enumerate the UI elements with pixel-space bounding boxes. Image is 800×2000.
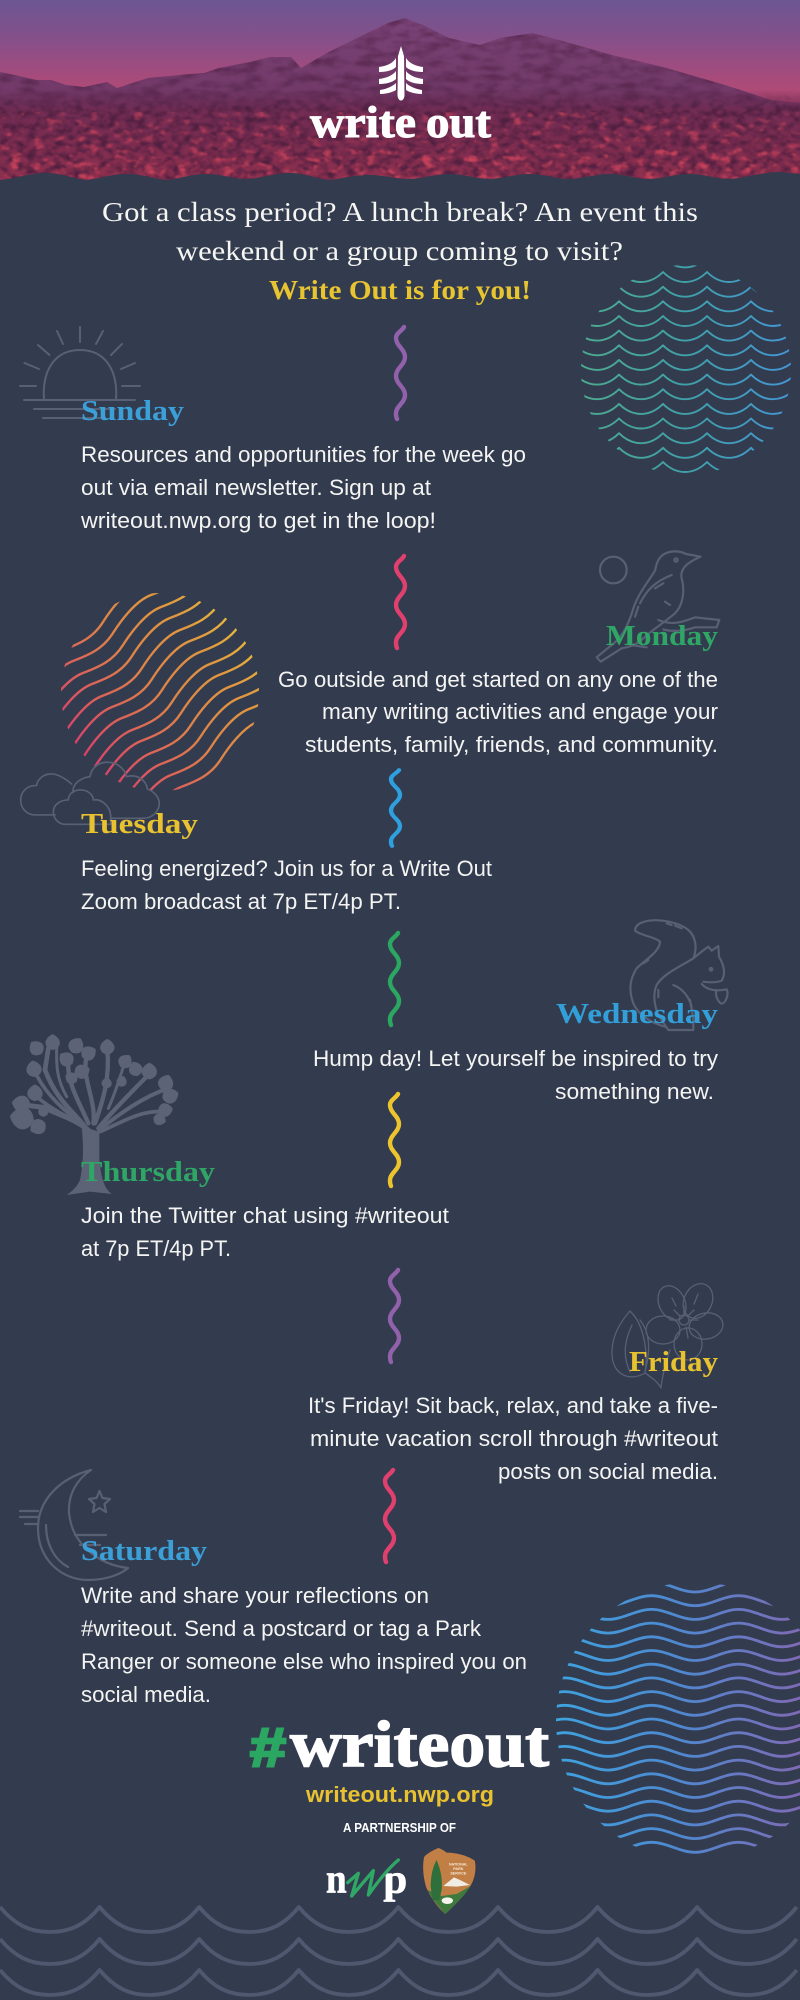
wave circle: teal to blue [575,257,800,472]
text: Saturday description: Write and share your reflections on [81,1583,429,1608]
squiggle: purple [396,327,405,419]
logo wordmark: out [426,98,491,147]
hashtag: #writeout: # [250,1716,286,1778]
icon: sun on horizon [20,327,140,418]
panel: Wednesday [313,920,727,1104]
intro text: Got a class period? A lunch break? An event this [102,197,698,227]
partnership label: A PARTNERSHIP OF [343,1821,456,1835]
text: Sunday description: Resources and opportunities for the week go [81,442,526,467]
header photo: mountain and town [0,0,800,188]
text: Saturday description [81,1583,527,1707]
text: Monday description: Go outside and get started on any one of the [278,667,718,692]
text: Saturday description: social media. [81,1682,211,1707]
panel: Tuesday [21,762,492,914]
text: Thursday description: Join the Twitter chat using #writeout [81,1203,449,1228]
day heading: Wednesday: Wednesday [556,999,718,1030]
squiggle: pink [396,556,405,648]
day heading: Sunday: Sunday [81,396,184,427]
logo: National Park Service arrowhead: NATIONAL [449,1862,468,1866]
text: Saturday description: #writeout. Send a postcard or tag a Park [81,1616,482,1641]
text: Sunday description [80,442,526,533]
squiggle: blue [391,770,400,846]
text: Friday description [308,1393,718,1484]
panel: Saturday [20,1470,527,1707]
text: Wednesday description [313,1046,718,1104]
hashtag: #writeout: writeout [290,1708,549,1781]
wave circle: red to yellow [61,593,259,790]
icon: crescent moon and star [20,1470,128,1580]
text: Monday description: students, family, friends, and community. [305,732,718,757]
logo: National Park Service arrowhead: PARK [453,1867,464,1871]
text: Tuesday description: Feeling energized? Join us for a Write Out [81,856,492,881]
intro text: weekend or a group coming to visit? [176,236,623,266]
day heading: Friday: Friday [629,1347,718,1378]
panel: Friday [308,1270,725,1484]
day heading: Thursday: Thursday [81,1157,215,1188]
text: Friday description: It's Friday! Sit back, relax, and take a five- [308,1393,718,1418]
text: Tuesday description: Zoom broadcast at 7p ET/4p PT. [81,889,401,914]
text: Wednesday description: Hump day! Let yourself be inspired to try [313,1046,718,1071]
icon: bird on branch [597,551,719,662]
text: Tuesday description [81,856,492,914]
wavy edge of dark body [0,172,800,200]
icon: flowers [612,1279,725,1388]
logo: National Park Service arrowhead [423,1848,475,1914]
panel: Thursday [8,1034,449,1261]
logo: National Park Service arrowhead: SERVICE [450,1872,467,1876]
text: Sunday description: writeout.nwp.org to get in the loop! [80,508,436,533]
icon: clouds [21,762,159,824]
intro text [102,197,698,266]
text: Thursday description: at 7p ET/4p PT. [81,1236,231,1261]
text: Wednesday description: something new. [555,1079,714,1104]
tagline: Write Out is for you! [269,275,531,305]
text: Monday description: many writing activities and engage your [322,699,718,724]
text: Monday description [278,667,718,757]
logo: nwp [326,1856,407,1902]
icon: tree [8,1034,181,1195]
squiggle: green [390,933,399,1025]
text: Thursday description [81,1203,449,1261]
bottom wave pattern [0,1907,797,1995]
logo: nwp: n [326,1856,347,1902]
squiggle: pink [385,1470,394,1562]
website url: writeout.nwp.org [305,1782,494,1807]
logo wordmark: write [310,98,416,147]
logo: write out [310,46,491,147]
wave circle: blue to purple [556,1584,800,1854]
text: Sunday description: out via email newsletter. Sign up at [81,475,431,500]
icon: pencil tree [379,46,423,100]
squiggle: purple [390,1270,399,1362]
day heading: Tuesday: Tuesday [81,809,198,840]
panel: Monday [278,551,719,757]
day heading: Saturday: Saturday [81,1536,207,1567]
day heading: Monday: Monday [606,621,718,652]
logo wordmark [310,98,491,147]
text: Friday description: posts on social media. [498,1459,718,1484]
panel: Sunday [20,327,526,533]
text: Friday description: minute vacation scroll through #writeout [310,1426,718,1451]
icon: squirrel [630,920,727,1030]
squiggle: yellow [390,1094,399,1186]
logo: nwp: p [383,1856,407,1902]
text: Saturday description: Ranger or someone else who inspired you on [81,1649,527,1674]
